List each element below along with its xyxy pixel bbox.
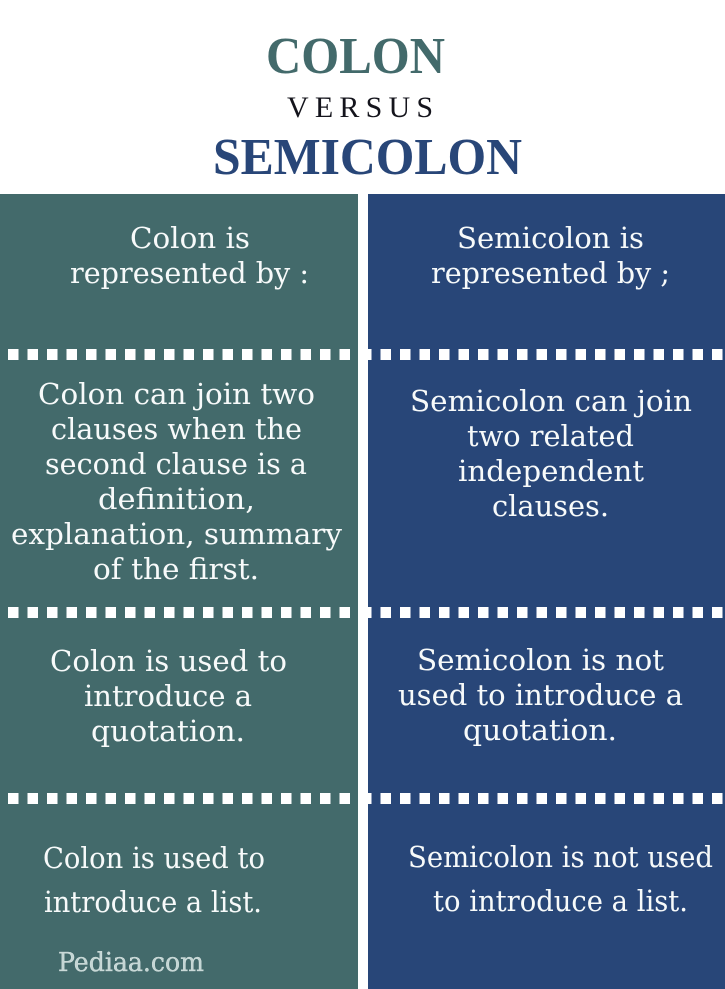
dotted divider row 3 [0, 793, 725, 804]
text block: colon symbol [70, 222, 309, 290]
text block: colon symbol: Colon is [130, 222, 250, 255]
text block: semicolon quotation [398, 644, 683, 747]
text block: colon clauses [11, 378, 343, 586]
dotted divider row 2 [0, 607, 725, 618]
text block: colon clauses: second clause is a [45, 448, 307, 481]
heading: versus: VERSUS [287, 91, 433, 124]
text block: colon quotation: Colon is used to [50, 645, 287, 678]
text block: semicolon clauses: clauses. [492, 490, 609, 523]
text block: semicolon symbol [431, 222, 670, 290]
heading: semicolon: SEMICOLON [213, 129, 522, 186]
text block: semicolon list: to introduce a list. [433, 885, 688, 918]
text block: colon symbol: represented by : [70, 257, 309, 290]
title [213, 28, 522, 186]
text block: colon clauses: clauses when the [51, 413, 302, 446]
text block: semicolon list: Semicolon is not used [408, 841, 713, 874]
text block: colon quotation [50, 645, 287, 748]
text block: semicolon clauses: Semicolon can join [410, 385, 692, 418]
text block: colon clauses: of the first. [93, 553, 259, 586]
text block: semicolon clauses: independent [458, 455, 645, 488]
text block: semicolon symbol: represented by ; [431, 257, 670, 290]
panel: semicolon column [368, 194, 725, 989]
text block: colon quotation: quotation. [91, 715, 245, 748]
watermark: Pediaa.com: Pediaa.com [58, 948, 204, 978]
text block: colon quotation: introduce a [84, 680, 252, 713]
text block: semicolon quotation: used to introduce a [398, 679, 683, 712]
text block: semicolon clauses: two related [467, 420, 634, 453]
text block: colon list: Colon is used to [43, 842, 265, 875]
dotted divider row 1 [0, 349, 725, 360]
text block: colon clauses: definition, [98, 483, 255, 516]
panel: colon column [0, 194, 358, 989]
text block: semicolon quotation: quotation. [463, 714, 617, 747]
text block: semicolon list [408, 841, 713, 918]
text block: semicolon clauses [410, 385, 692, 523]
text block: colon list [43, 842, 265, 919]
text block: colon clauses: Colon can join two [38, 378, 315, 411]
heading: colon: COLON [266, 28, 445, 85]
text block: colon clauses: explanation, summary [11, 518, 343, 551]
text block: colon list: introduce a list. [44, 886, 262, 919]
text block: semicolon quotation: Semicolon is not [417, 644, 665, 677]
text block: semicolon symbol: Semicolon is [457, 222, 644, 255]
